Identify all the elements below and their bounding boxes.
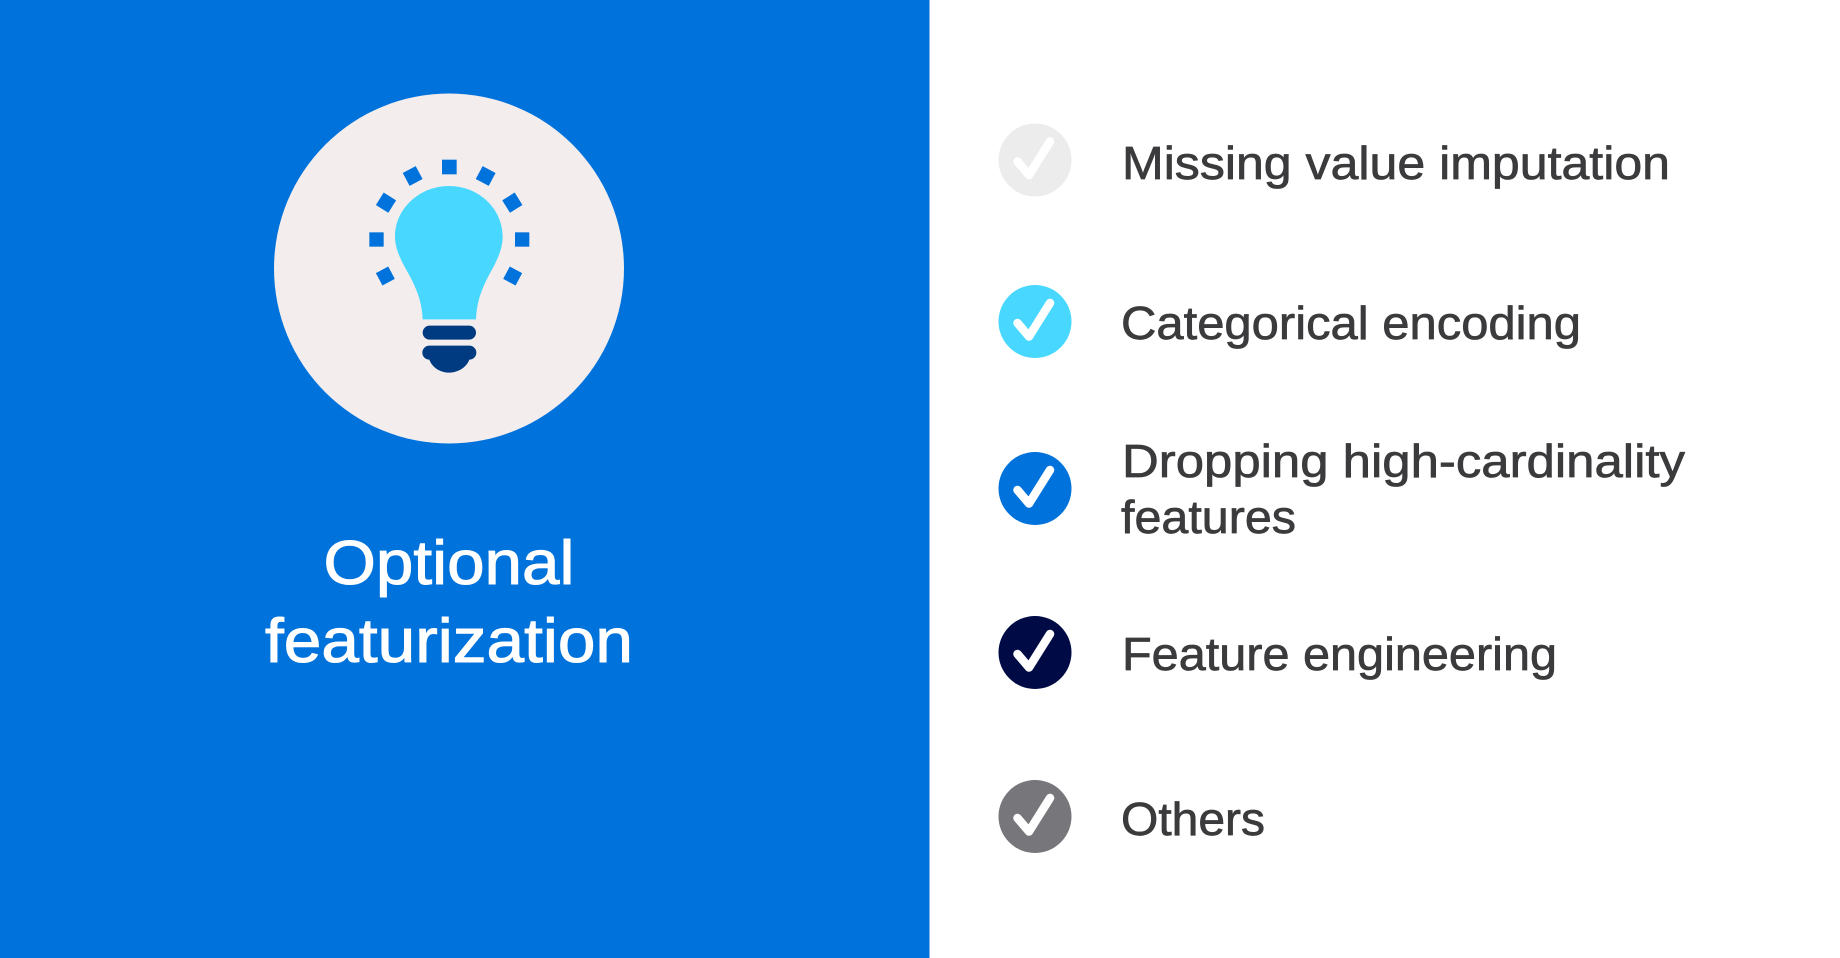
list item: Others: Others <box>1121 793 1265 845</box>
list item: Categorical encoding: Categorical encoding <box>1121 297 1581 349</box>
list item: Categorical encoding <box>998 285 1581 358</box>
title: featurization <box>265 607 633 676</box>
list item: Feature engineering <box>998 616 1557 689</box>
list item: Dropping high-cardinality features: Dropping high-cardinality <box>1122 435 1685 487</box>
list item: Feature engineering: Feature engineering <box>1122 628 1557 680</box>
list item: Others <box>998 780 1265 853</box>
list item: Dropping high-cardinality features: features <box>1121 491 1296 543</box>
list item: Missing value imputation <box>998 124 1670 196</box>
icon: light bulb in circle <box>274 94 624 444</box>
list item: Missing value imputation: Missing value imputation <box>1122 137 1670 189</box>
title: Optional <box>324 529 574 598</box>
title <box>265 529 633 676</box>
list item: Dropping high-cardinality features <box>998 435 1685 543</box>
panel: left blue panel <box>0 0 930 958</box>
